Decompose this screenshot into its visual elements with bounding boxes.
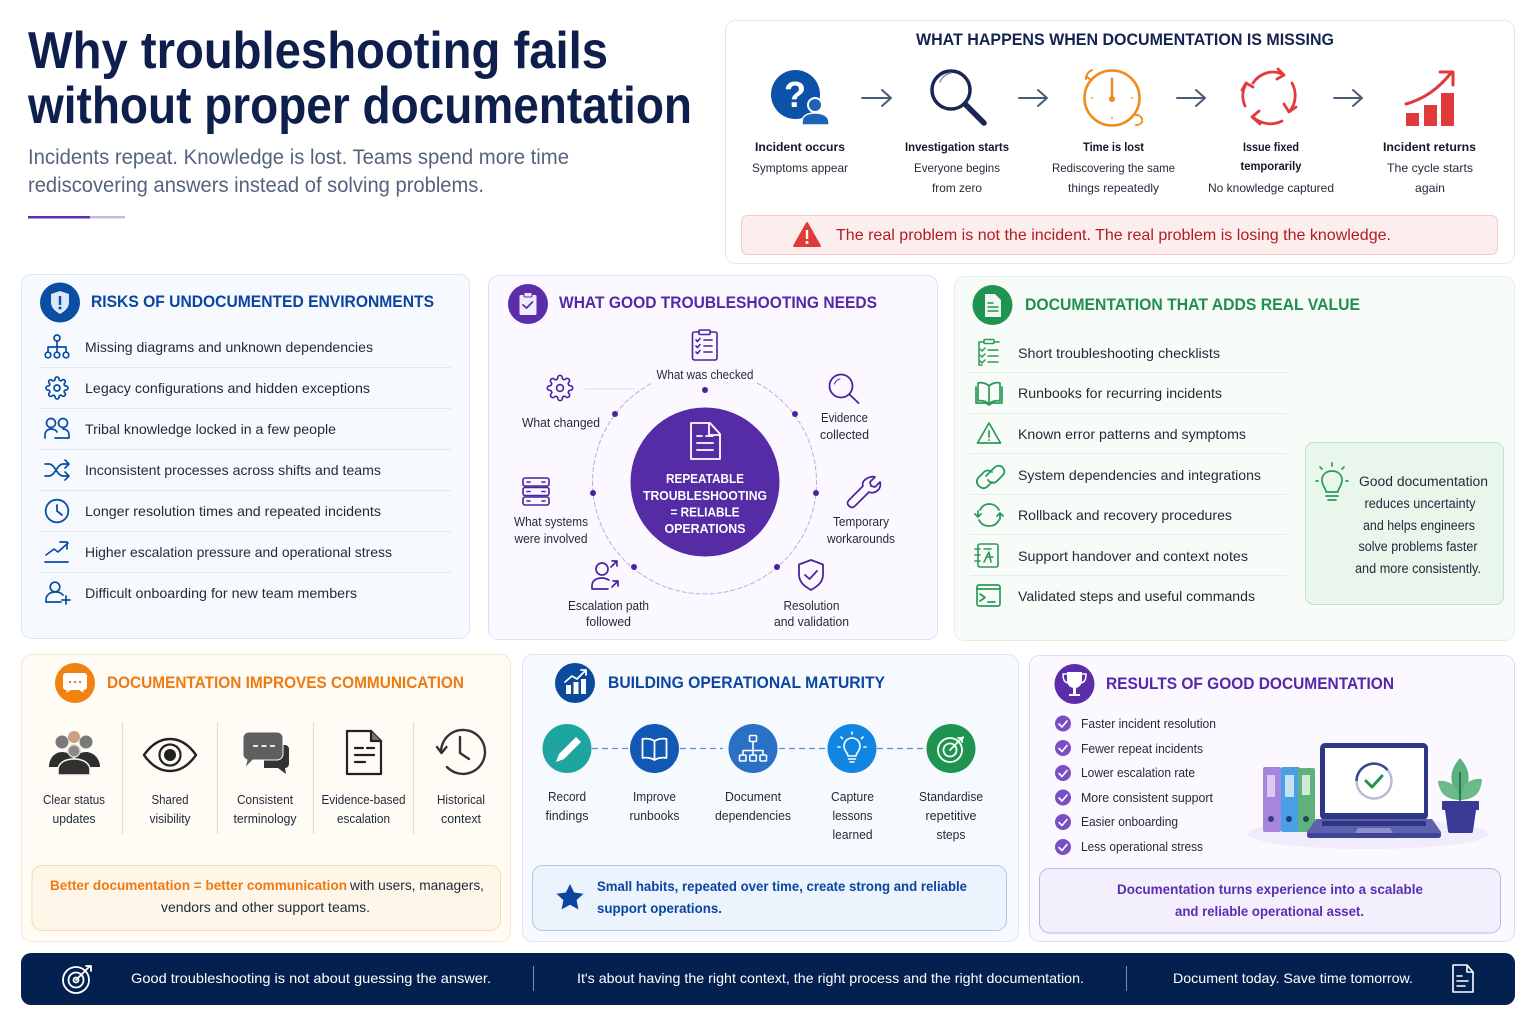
- step: incident returns: [1383, 140, 1476, 195]
- item text: Short troubleshooting checklists: [1018, 345, 1220, 361]
- heading icon: chat bubble: [55, 663, 95, 703]
- label: collected: [820, 428, 869, 442]
- icon: warning triangle: [794, 223, 820, 246]
- step: incident occurs: Symptoms appear: [752, 161, 848, 175]
- step icon: book: [630, 724, 679, 773]
- result text: Lower escalation rate: [1081, 766, 1195, 780]
- step label: learned: [832, 828, 873, 842]
- label: [826, 515, 895, 546]
- icon: chat bubbles: [243, 732, 289, 774]
- risk text: Inconsistent processes across shifts and teams: [85, 462, 381, 478]
- icon: light bulb: [1316, 463, 1348, 500]
- item text: Support handover and context notes: [1018, 548, 1248, 564]
- label: [437, 793, 485, 826]
- item text: System dependencies and integrations: [1018, 467, 1261, 483]
- panel heading: DOCUMENTATION IMPROVES COMMUNICATION: [107, 674, 464, 692]
- step label: [630, 790, 680, 823]
- icon: clock: [1084, 70, 1142, 126]
- icon: recovery arrows: [975, 504, 1003, 526]
- step label: Improve: [633, 790, 676, 804]
- arrow: [1334, 90, 1362, 106]
- item text: Validated steps and useful commands: [1018, 588, 1255, 604]
- item text: Known error patterns and symptoms: [1018, 426, 1246, 442]
- central text: OPERATIONS: [664, 521, 746, 536]
- risk text: Longer resolution times and repeated incidents: [85, 503, 381, 519]
- panel: what good troubleshooting needs: [488, 276, 938, 640]
- step: time is lost: [1052, 140, 1175, 195]
- label: [774, 599, 849, 629]
- icon: document: [347, 731, 381, 774]
- callout: good documentation: solve problems faster: [1358, 539, 1478, 554]
- illustration: binders, laptop and plant: [1248, 743, 1488, 849]
- label: [150, 793, 191, 826]
- heading icon: document: [972, 285, 1012, 325]
- result: check: [1055, 740, 1071, 756]
- label: Historical: [437, 793, 485, 807]
- footer text: Good troubleshooting is not about guessing the answer.: [131, 970, 491, 986]
- icon: eye: [144, 739, 196, 771]
- icon: history clock: [437, 730, 485, 774]
- step label: [715, 790, 791, 823]
- label: [820, 411, 869, 442]
- label: Evidence-based: [322, 793, 406, 807]
- step: incident occurs: [752, 140, 848, 175]
- risk text: Legacy configurations and hidden exceptions: [85, 380, 370, 396]
- icon: clock: [46, 500, 68, 522]
- icon: incident question: [771, 70, 829, 125]
- label: [514, 515, 588, 546]
- panel heading: BUILDING OPERATIONAL MATURITY: [608, 674, 885, 692]
- icon: trend line: [45, 542, 68, 562]
- icon: target: [63, 966, 91, 993]
- callout: good documentation: and more consistently.: [1355, 561, 1481, 576]
- icon: link: [977, 466, 1004, 488]
- result text: Faster incident resolution: [1081, 717, 1216, 731]
- icon: add user: [46, 582, 70, 604]
- label: followed: [586, 615, 631, 629]
- panel heading: RESULTS OF GOOD DOCUMENTATION: [1106, 675, 1394, 693]
- label: terminology: [234, 812, 297, 826]
- step label: lessons: [832, 809, 872, 823]
- arrow: [1177, 90, 1205, 106]
- icon: server stack: [523, 478, 549, 505]
- panel heading: WHAT GOOD TROUBLESHOOTING NEEDS: [559, 294, 877, 312]
- label: visibility: [150, 812, 191, 826]
- ring with dots: [585, 383, 819, 594]
- heading icon: shield: [40, 282, 80, 322]
- label: Evidence: [821, 411, 868, 425]
- icon: hierarchy: [45, 335, 69, 358]
- icon: book: [976, 383, 1002, 405]
- step: incident occurs: Incident occurs: [755, 140, 845, 154]
- arrow: [862, 90, 891, 106]
- icon: repeating cycle: [1242, 69, 1296, 124]
- icon: magnifier: [932, 71, 984, 123]
- label: What was checked: [656, 368, 754, 382]
- label: context: [441, 812, 482, 826]
- step label: findings: [546, 809, 588, 823]
- icon: warning: [978, 423, 1000, 443]
- icon: gear: [46, 377, 68, 399]
- result: check: [1055, 790, 1071, 806]
- step label: Capture: [831, 790, 874, 804]
- callout: scalable asset: Documentation turns experience into a scalable: [1117, 881, 1423, 897]
- step: time is lost: things repeatedly: [1068, 181, 1159, 195]
- label: [234, 793, 297, 826]
- label: updates: [52, 812, 96, 826]
- icon: magnifier: [830, 374, 858, 403]
- callout: small habits: support operations.: [597, 900, 722, 916]
- icon: checklist clipboard: [692, 330, 717, 360]
- step label: [831, 790, 874, 842]
- callout: real problem: [742, 216, 1498, 254]
- step: issue fixed temporarily: temporarily: [1240, 159, 1302, 173]
- result: check: [1055, 814, 1071, 830]
- step: incident returns: again: [1415, 181, 1445, 195]
- arrow: [1019, 90, 1047, 106]
- icon: document: [691, 423, 720, 459]
- step: issue fixed temporarily: Issue fixed: [1243, 140, 1299, 154]
- icon: team: [49, 731, 100, 775]
- icon: escalation person: [592, 561, 618, 589]
- icon: rising bars: [1406, 72, 1454, 126]
- result text: Easier onboarding: [1081, 815, 1178, 829]
- step icon: target: [926, 724, 976, 773]
- panel: results of good documentation: [1030, 656, 1514, 942]
- callout: good documentation: and helps engineers: [1363, 518, 1475, 533]
- footer banner: [21, 953, 1515, 1005]
- panel: documentation improves communication: [22, 654, 510, 942]
- step: time is lost: Rediscovering the same: [1052, 161, 1175, 175]
- step icon: hierarchy: [728, 724, 778, 773]
- step: investigation starts: Everyone begins: [914, 161, 1000, 175]
- label: [322, 793, 406, 826]
- step: investigation starts: [905, 140, 1009, 195]
- risk text: Tribal knowledge locked in a few people: [85, 421, 336, 437]
- result text: Less operational stress: [1081, 840, 1203, 854]
- step: issue fixed temporarily: No knowledge captured: [1208, 181, 1334, 195]
- step: incident returns: The cycle starts: [1387, 161, 1473, 175]
- central text: = RELIABLE: [670, 504, 740, 520]
- step label: [546, 790, 588, 823]
- icon: terminal: [977, 585, 1000, 606]
- step label: Document: [725, 790, 782, 804]
- central text: [643, 471, 767, 536]
- step label: dependencies: [715, 809, 791, 823]
- central text: TROUBLESHOOTING: [643, 488, 767, 503]
- icon: shuffle: [45, 460, 69, 480]
- callout: good documentation: Good documentation: [1359, 474, 1488, 489]
- panel heading: WHAT HAPPENS WHEN DOCUMENTATION IS MISSING: [916, 30, 1334, 49]
- icon: star: [556, 884, 584, 909]
- title: [27, 22, 692, 135]
- label: What systems: [514, 515, 588, 529]
- label: Consistent: [237, 793, 293, 807]
- callout: better communication: with users, managers,: [349, 877, 484, 893]
- result: check: [1055, 765, 1071, 781]
- icon: shield check: [799, 560, 823, 590]
- panel: documentation that adds real value: [954, 276, 1514, 640]
- icon: wrench: [848, 477, 880, 508]
- step: investigation starts: Investigation starts: [905, 140, 1009, 154]
- label: workarounds: [826, 532, 895, 546]
- heading icon: growth chart: [555, 663, 595, 703]
- icon: checklist: [979, 340, 999, 365]
- icon: people: [45, 418, 69, 438]
- subtitle: rediscovering answers instead of solving problems.: [28, 174, 484, 197]
- icon: document: [1453, 965, 1473, 992]
- label: Temporary: [833, 515, 890, 529]
- callout: better communication: [32, 866, 500, 930]
- callout: better communication: Better documentation = better communication: [50, 877, 347, 893]
- callout: good documentation: [1306, 442, 1504, 604]
- title: without proper documentation: [27, 77, 692, 135]
- panel heading: RISKS OF UNDOCUMENTED ENVIRONMENTS: [91, 293, 434, 311]
- label: [43, 793, 105, 826]
- callout: small habits: [532, 866, 1006, 930]
- subtitle: [28, 146, 569, 197]
- label: [568, 599, 649, 629]
- step label: runbooks: [630, 809, 680, 823]
- step: issue fixed temporarily: [1208, 140, 1334, 195]
- step: time is lost: Time is lost: [1083, 140, 1144, 154]
- icon: notebook: [975, 544, 998, 567]
- result: check: [1055, 716, 1071, 732]
- step icon: pencil: [542, 724, 592, 773]
- panel: what happens when documentation is missing: [726, 20, 1514, 264]
- label: were involved: [514, 532, 588, 546]
- heading icon: clipboard check: [508, 284, 548, 324]
- step label: steps: [936, 828, 966, 842]
- label: escalation: [337, 812, 390, 826]
- icon: gear: [547, 375, 573, 401]
- step label: Record: [548, 790, 586, 804]
- risk text: Difficult onboarding for new team members: [85, 585, 357, 601]
- result text: More consistent support: [1081, 791, 1214, 805]
- risk text: Missing diagrams and unknown dependencies: [85, 339, 373, 355]
- footer text: Document today. Save time tomorrow.: [1173, 970, 1413, 986]
- risk text: Higher escalation pressure and operational stress: [85, 544, 392, 560]
- step label: repetitive: [926, 809, 977, 823]
- item text: Rollback and recovery procedures: [1018, 507, 1232, 523]
- step: investigation starts: from zero: [932, 181, 982, 195]
- icon: incident question: ?: [784, 74, 806, 115]
- panel heading: DOCUMENTATION THAT ADDS REAL VALUE: [1025, 296, 1360, 314]
- result text: Fewer repeat incidents: [1081, 742, 1203, 756]
- result: check: [1055, 839, 1071, 855]
- label: Clear status: [43, 793, 105, 807]
- item text: Runbooks for recurring incidents: [1018, 385, 1222, 401]
- callout: better communication: vendors and other support teams.: [161, 899, 370, 915]
- callout: small habits: Small habits, repeated over time, create strong and reliable: [597, 878, 967, 894]
- step: incident returns: Incident returns: [1383, 140, 1476, 154]
- dashed connectors: [592, 748, 925, 750]
- central text: REPEATABLE: [666, 471, 744, 486]
- callout: scalable asset: [1040, 868, 1500, 933]
- panel: risks of undocumented environments: [22, 274, 470, 638]
- step label: [919, 790, 983, 842]
- subtitle: Incidents repeat. Knowledge is lost. Teams spend more time: [28, 146, 569, 169]
- label: Resolution: [784, 599, 840, 613]
- panel: building operational maturity: [522, 654, 1018, 942]
- title: Why troubleshooting fails: [28, 22, 608, 80]
- label: Escalation path: [568, 599, 649, 613]
- footer text: It's about having the right context, the right process and the right documentation.: [577, 970, 1084, 986]
- callout: good documentation: reduces uncertainty: [1364, 496, 1476, 511]
- label: and validation: [774, 615, 849, 629]
- heading icon: trophy: [1054, 664, 1094, 704]
- step label: Standardise: [919, 790, 983, 804]
- label: What changed: [522, 416, 600, 430]
- callout: real problem: The real problem is not the incident. The real problem is losing the knowledge.: [836, 227, 1391, 244]
- step icon: light bulb: [828, 724, 876, 773]
- label: Shared: [152, 793, 189, 807]
- central circle: [630, 408, 780, 556]
- callout: scalable asset: and reliable operational asset.: [1175, 903, 1364, 919]
